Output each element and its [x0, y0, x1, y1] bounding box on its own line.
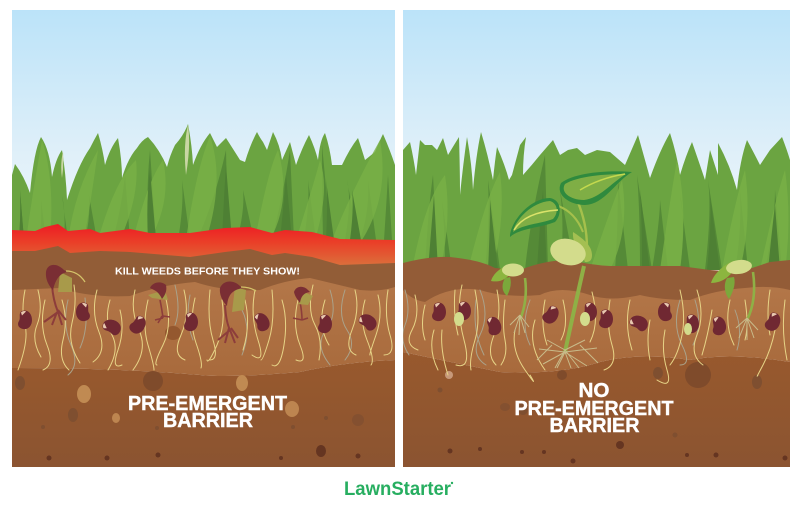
weed seedling 3	[218, 281, 256, 343]
weed seedling 1	[44, 265, 85, 325]
deep soil	[403, 352, 790, 467]
plant: large centre seedling	[510, 171, 632, 368]
plant: left seedling	[491, 264, 529, 335]
label: pre-emergent barrier: BARRIER	[163, 410, 254, 432]
grass	[12, 124, 395, 240]
plant: right seedling	[711, 258, 758, 340]
soil stones	[438, 362, 788, 464]
middle soil layer	[12, 270, 395, 376]
label: no pre-emergent barrier: PRE-EMERGENT	[514, 398, 674, 420]
label: no pre-emergent barrier: BARRIER	[550, 415, 640, 437]
label: no pre-emergent barrier: NO	[578, 380, 610, 402]
soil stones	[15, 326, 364, 460]
weed seedling 4	[293, 287, 313, 320]
middle soil layer	[403, 286, 790, 373]
label: no pre-emergent barrier	[514, 380, 674, 437]
panel: no pre-emergent barrier	[403, 10, 790, 467]
weed roots	[18, 285, 392, 375]
red pre-emergent barrier band	[12, 224, 395, 265]
upper soil layer	[403, 257, 790, 302]
upper soil layer	[12, 246, 395, 296]
heading: kill weeds: KILL WEEDS BEFORE THEY SHOW!	[115, 266, 300, 278]
sky	[12, 10, 395, 200]
logo: LawnStarter: LawnStarter	[344, 479, 452, 500]
deep soil	[12, 360, 395, 467]
bean seeds	[432, 302, 783, 337]
sky	[403, 10, 790, 193]
panel: with pre-emergent barrier	[12, 10, 395, 467]
grass	[403, 132, 790, 270]
bean seeds	[18, 303, 379, 337]
weed roots	[403, 285, 787, 383]
label: pre-emergent barrier	[128, 393, 287, 432]
label: pre-emergent barrier: PRE-EMERGENT	[128, 393, 287, 415]
weed seedling 2	[148, 282, 170, 323]
